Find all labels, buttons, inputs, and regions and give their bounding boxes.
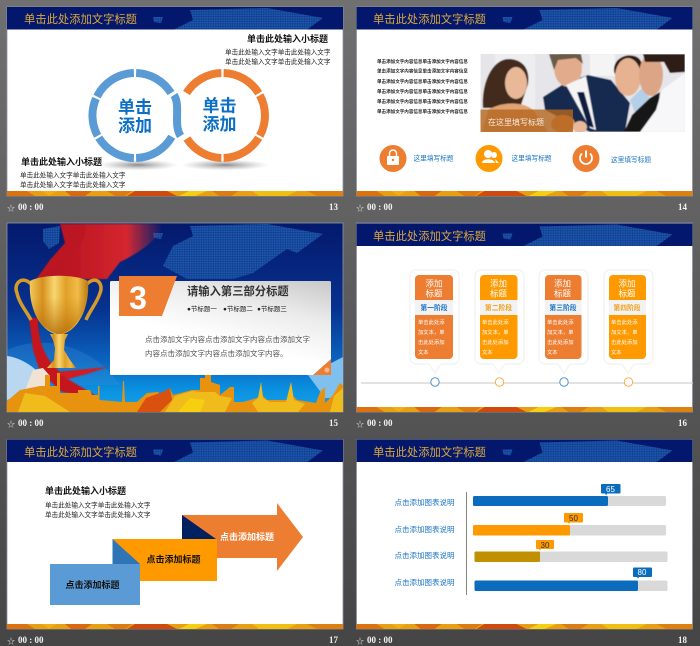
bar: 65: 65 (606, 485, 615, 494)
text: blue ring label: 单击 (118, 98, 152, 117)
icon: users (476, 145, 502, 172)
callout: stage three: 击此处添加 (547, 338, 574, 346)
callout: stage one: 加文本，单 (418, 328, 445, 336)
footer: slide 14: 00 : 00 (367, 202, 393, 212)
callout: stage two: 标题 (490, 288, 507, 298)
callout: stage three: 第三阶段 (549, 303, 577, 312)
chart labels: 点击添加图表说明 (394, 497, 454, 507)
callout: stage four: 添加 (618, 278, 636, 288)
step: middle: 点击添加标题 (146, 554, 201, 564)
footer: slide 15: ☆ (7, 420, 15, 429)
text: orange ring label: 添加 (202, 115, 236, 134)
arrow: top step: 点击添加标题 (220, 531, 274, 542)
callout: stage two: 第二阶段 (485, 303, 512, 312)
text: blue ring label (118, 98, 152, 136)
icon: lock (380, 145, 406, 172)
panel: slide 14 photo (356, 7, 692, 196)
text: orange ring label: 单击 (202, 96, 236, 116)
text block: bottom left: 单击此处输入小标题 (21, 156, 102, 167)
step: middle (112, 539, 217, 581)
chart labels: 点击添加图表说明 (394, 577, 454, 587)
footer: slide 16 (356, 418, 688, 429)
text block: top right: 单击此处输入小标题 (247, 33, 328, 44)
text block: section body (145, 334, 310, 358)
text block: left column: 单击添加文字内容信息单击添加文字内容信息 (377, 58, 468, 65)
timeline markers (431, 378, 633, 386)
footer: slide 13: ☆ (7, 204, 15, 213)
footer: slide 13 (7, 202, 338, 213)
list: section topics: ●节标题三 (257, 304, 287, 313)
heading: slide 13 title: 单击此处添加文字标题 (24, 12, 137, 26)
icon: corner (313, 359, 331, 375)
footer: slide 17: 00 : 00 (18, 635, 44, 645)
callout: stage three (539, 270, 588, 373)
bar: 50 (473, 513, 666, 536)
overlay caption: 在这里填写标题 (488, 117, 544, 127)
timeline axis (361, 382, 692, 384)
callout: stage three: 添加 (554, 278, 571, 288)
image: business team photo (480, 49, 686, 133)
text block: left column: 单击添加文字内容信息单击添加文字内容信息 (377, 108, 468, 115)
circle shadows (98, 160, 269, 170)
callout: stage four: 文本 (611, 348, 622, 356)
icon: power (572, 145, 600, 172)
panel: slide 18 bar chart (356, 440, 692, 629)
image: hand holding trophy (18, 368, 50, 410)
footer: slide 14: 14 (678, 202, 688, 212)
callout: stage four: 第四阶段 (613, 303, 641, 312)
bar: 65 (473, 484, 666, 506)
text block: intro: 单击此处输入文字单击此处输入文字 (45, 510, 151, 519)
step: bottom (50, 564, 140, 605)
panel: slide 13 circles (7, 7, 343, 196)
footer: slide 16: ☆ (356, 420, 364, 429)
label: power: 这里填写标题 (611, 155, 651, 164)
heading: slide 16 title: 单击此处添加文字标题 (373, 229, 486, 243)
text block: section body: 内容点击添加文字内容点击添加文字内容。 (145, 348, 288, 358)
label: users: 这里填写标题 (512, 154, 552, 162)
arrow: top step (182, 503, 303, 571)
bar: 80 (474, 568, 668, 591)
footer: slide 18: 18 (678, 635, 688, 645)
chart: orange ring (186, 73, 265, 158)
callout: stage three: 加文本，单 (547, 328, 574, 336)
overlay caption (480, 110, 573, 132)
footer: slide 15: 00 : 00 (18, 418, 44, 428)
callout: stage two: 添加 (490, 278, 507, 288)
footer: slide 18 (356, 635, 688, 646)
callout: stage three: 单击此处添 (547, 318, 574, 326)
bar: 30: 30 (541, 541, 550, 550)
text: blue ring label: 添加 (118, 116, 152, 136)
label: lock: 这里填写标题 (414, 154, 454, 162)
footer: slide 18: 00 : 00 (367, 635, 393, 645)
text block: left column: 单击添加文字内容信息单击添加文字内容信息 (377, 88, 468, 95)
text block: bottom left (20, 156, 126, 189)
footer: slide 18: ☆ (356, 637, 364, 646)
text block: top right (225, 33, 331, 66)
callout: stage two: 文本 (482, 348, 493, 356)
text block: top right: 单击此处输入文字单击此处输入文字 (225, 48, 331, 56)
chart labels: 点击添加图表说明 (394, 550, 454, 560)
panel: slide 16 timeline (356, 223, 692, 412)
footer: slide 13: 00 : 00 (18, 202, 44, 212)
footer: slide 14 (356, 202, 688, 213)
callout: stage one: 击此处添加 (418, 338, 444, 346)
callout: stage four: 单击此处添 (611, 318, 638, 326)
text block: bottom left: 单击此处输入文字单击此处输入文字 (20, 180, 126, 189)
bar: 50: 50 (569, 514, 578, 523)
chart axis (466, 492, 467, 595)
heading: slide 14 title: 单击此处添加文字标题 (373, 12, 486, 26)
footer: slide 16: 16 (678, 418, 688, 428)
text block: left column (377, 58, 468, 115)
chart: blue ring (92, 73, 180, 158)
heading: slide 18 title: 单击此处添加文字标题 (373, 445, 486, 459)
badge: section number: 3 (129, 280, 147, 316)
card: section info (110, 276, 331, 375)
text block: intro: 单击此处输入文字单击此处输入文字 (45, 500, 151, 510)
callout: stage two (475, 270, 524, 373)
heading: section title: 请输入第三部分标题 (187, 284, 289, 298)
chart labels (394, 497, 454, 587)
callout: stage one (410, 270, 459, 373)
footer: slide 14: ☆ (356, 204, 364, 213)
list: section topics: ●节标题二 (223, 304, 253, 313)
footer: slide 17 (7, 635, 338, 646)
callout: stage four: 击此处添加 (611, 338, 638, 346)
callout: stage four (604, 270, 653, 373)
callout: stage three: 标题 (554, 288, 571, 298)
callout: stage one: 添加 (425, 278, 443, 288)
text block: top right: 单击此处输入文字单击此处输入文字 (225, 57, 331, 66)
list: section topics: ●节标题一 (187, 304, 217, 313)
image: red ribbon (29, 224, 163, 398)
panel: slide 15 section cover (7, 223, 343, 412)
text block: left column: 单击添加文字内容信息单击添加文字内容信息 (377, 98, 468, 105)
callout: stage one: 单击此处添 (418, 318, 445, 326)
callout: stage four: 加文本，单 (611, 328, 638, 336)
chart labels: 点击添加图表说明 (394, 524, 454, 534)
footer: slide 15: 15 (329, 418, 338, 428)
text block: intro: 单击此处输入小标题 (45, 485, 126, 496)
image: city skyline (7, 373, 343, 412)
footer: slide 17: ☆ (7, 637, 15, 646)
heading: slide 17 title: 单击此处添加文字标题 (24, 445, 137, 459)
text block: bottom left: 单击此处输入文字单击此处输入文字 (20, 170, 126, 180)
step: bottom: 点击添加标题 (66, 579, 120, 590)
callout: stage one: 标题 (425, 288, 443, 298)
callout: stage three: 文本 (547, 348, 558, 356)
callout: stage one: 文本 (418, 348, 429, 356)
callout: stage one: 第一阶段 (420, 303, 448, 312)
footer: slide 15 (7, 418, 338, 429)
callout: stage four: 标题 (618, 288, 636, 298)
image: trophy (16, 276, 101, 368)
footer: slide 17: 17 (329, 635, 338, 645)
text block: intro (45, 485, 151, 519)
text: orange ring label (202, 96, 236, 134)
callout: stage two: 单击此处添 (482, 318, 509, 326)
text block: left column: 单击添加文字内容信息单击添加文字内容信息 (377, 68, 468, 74)
callout: stage two: 击此处添加 (482, 338, 508, 346)
bar: 80: 80 (638, 568, 647, 577)
bar: 30 (474, 540, 668, 562)
panel: slide 17 staircase arrow (7, 440, 343, 629)
badge: section number (119, 276, 177, 316)
list: section topics (187, 304, 287, 313)
text block: section body: 点击添加文字内容点击添加文字内容点击添加文字 (145, 334, 310, 344)
footer: slide 13: 13 (329, 202, 338, 212)
callout: stage two: 加文本，单 (482, 328, 509, 336)
text block: left column: 单击添加文字内容信息单击添加文字内容信息 (377, 78, 468, 85)
footer: slide 16: 00 : 00 (367, 418, 393, 428)
